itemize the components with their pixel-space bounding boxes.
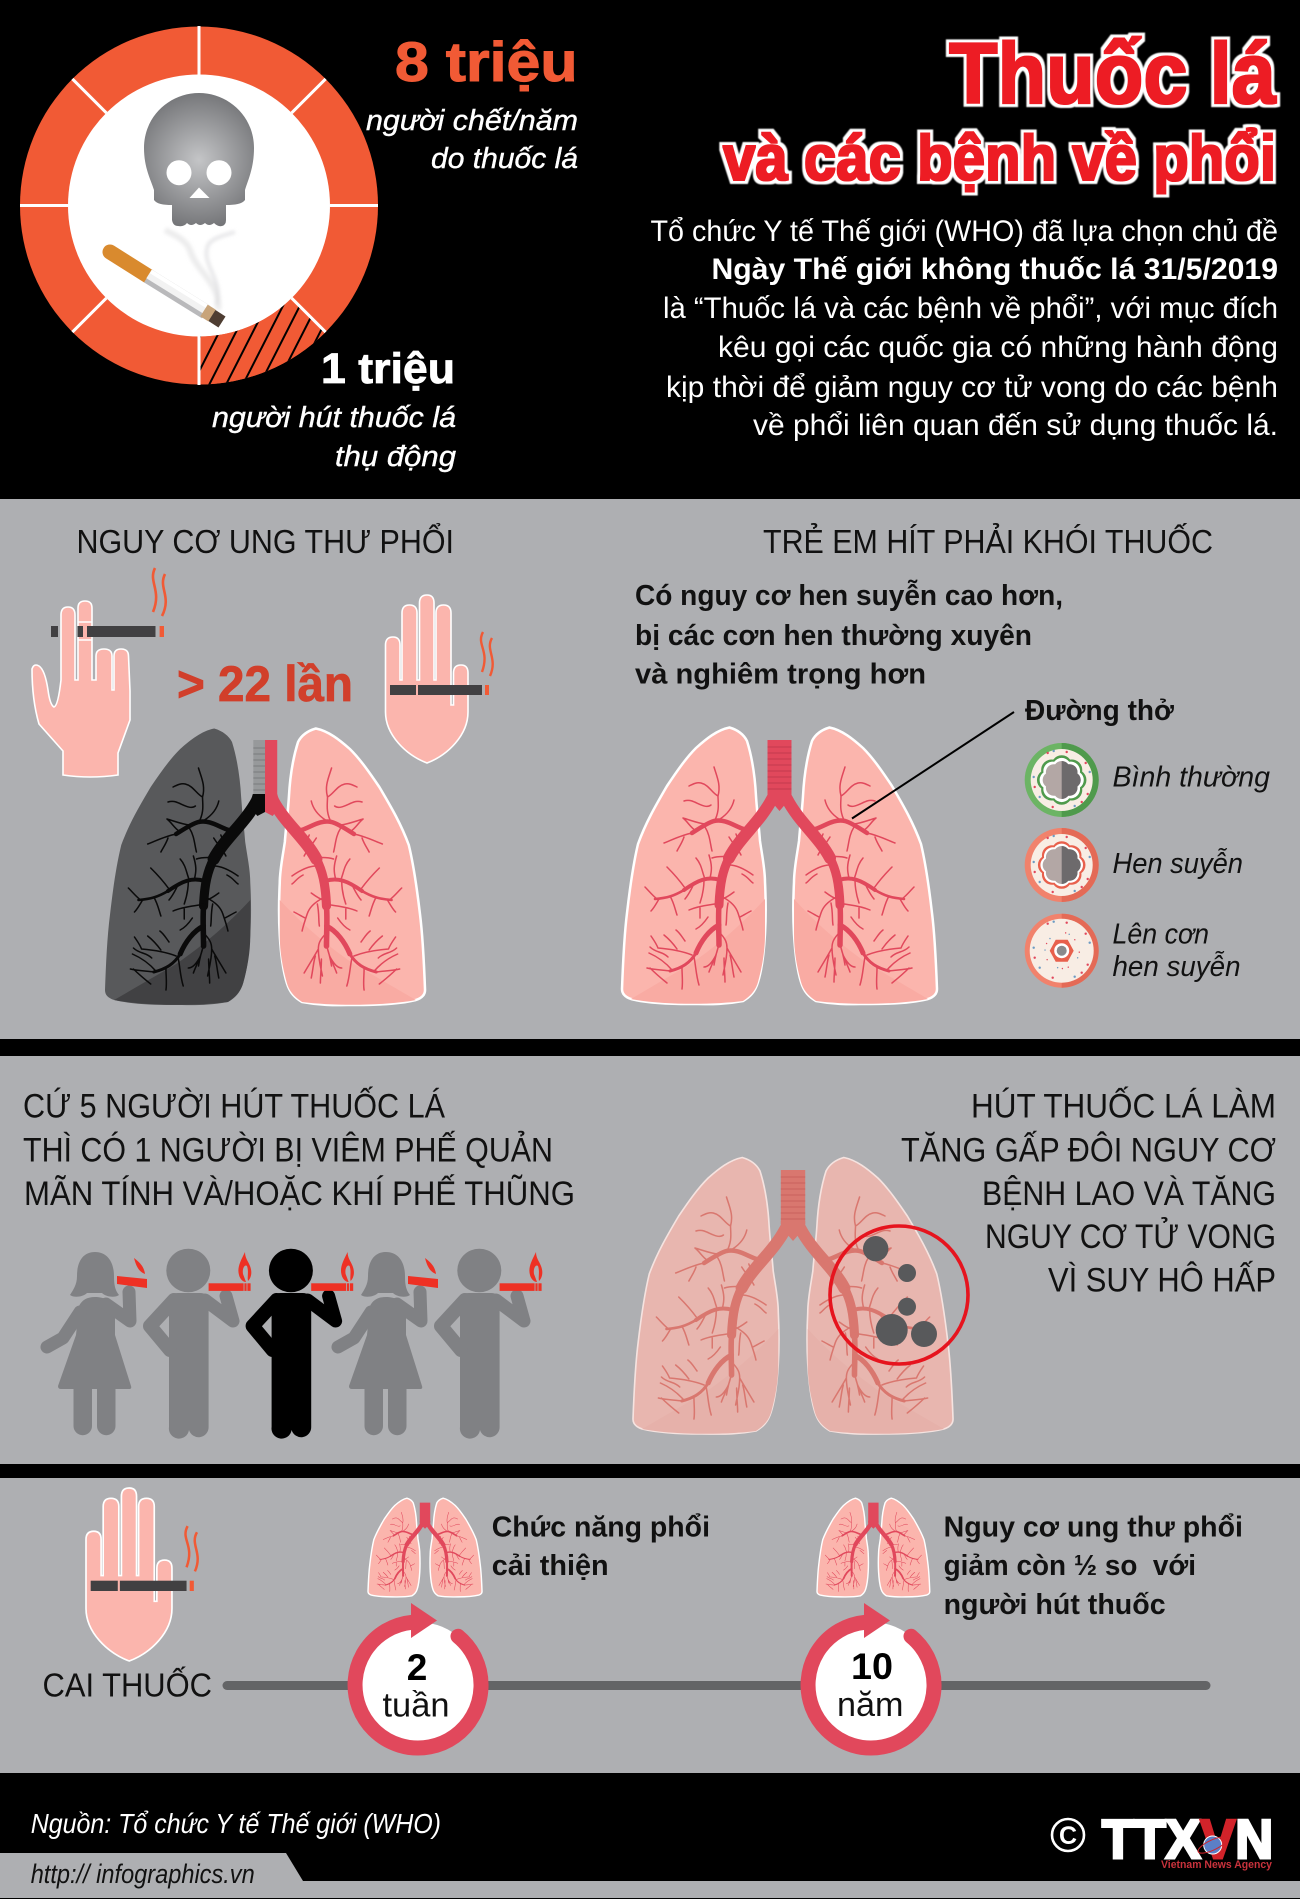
logo: TTXVN: TTXVN (1102, 1808, 1273, 1870)
label: asthma: Hen suyễn (1112, 847, 1243, 880)
panel: lung cancer risk and children (0, 499, 1300, 1039)
label: asthma attack (1112, 918, 1240, 983)
text block: asthma risk (635, 578, 1063, 690)
statistic: 1 million passive smokers: người hút thuốc lá (212, 402, 456, 434)
icon: normal airway (1025, 743, 1099, 817)
icon: cigarette (110, 252, 222, 322)
ribbon with website (0, 1853, 1300, 1898)
icon: skull (144, 93, 254, 226)
text block: tuberculosis risk (901, 1086, 1276, 1300)
milestone: two weeks: 2 (407, 1647, 427, 1688)
statistic: 1 million passive smokers (212, 345, 456, 473)
lungs: tuberculosis lesions (633, 1158, 968, 1434)
black smoker lung (105, 728, 265, 1005)
woman smoker 1 (47, 1252, 147, 1435)
text block: tuberculosis risk: VÌ SUY HÔ HẤP (1048, 1262, 1276, 1300)
text: cancer risk halves: giảm còn ½ so với (944, 1550, 1196, 1582)
heading: lung cancer risk: NGUY CƠ UNG THƯ PHỔI (76, 523, 454, 560)
woman smoker 4 (338, 1252, 438, 1435)
icon: hand holding cigarette between fingers (32, 568, 166, 777)
mini lungs: two weeks (368, 1498, 482, 1597)
label: airway: Đường thở (1025, 695, 1174, 727)
highlight circle (830, 1226, 968, 1364)
text: cancer risk halves (944, 1512, 1243, 1621)
title: Thuốc lá (949, 26, 1277, 122)
icon: hand with cigarette, quitting (86, 1488, 198, 1661)
lungs: smoker black lung versus healthy lung (105, 728, 425, 1005)
text block: tuberculosis risk: HÚT THUỐC LÁ LÀM (971, 1086, 1276, 1126)
label: quit smoking: CAI THUỐC (42, 1666, 212, 1704)
intro text block: kịp thời để giảm nguy cơ tử vong do các bệnh (666, 371, 1278, 404)
title (723, 26, 1277, 194)
label: normal: Bình thường (1112, 762, 1270, 794)
text: cancer risk halves: người hút thuốc (944, 1589, 1166, 1621)
lungs: healthy pair (622, 728, 937, 1004)
text: lung function improves (492, 1512, 710, 1582)
icon: asthma airway (1025, 828, 1099, 902)
intro text block: Tổ chức Y tế Thế giới (WHO) đã lựa chọn chủ đề (650, 215, 1278, 248)
man smoker 2 (150, 1249, 251, 1439)
text block: one in five smokers: MÃN TÍNH VÀ/HOẶC KHÍ PHẾ THŨNG (24, 1175, 575, 1213)
logo: TTXVN: Vietnam News Agency (1161, 1859, 1273, 1871)
text block: asthma risk: và nghiêm trọng hơn (635, 658, 926, 690)
intro text block: Ngày Thế giới không thuốc lá 31/5/2019 (712, 253, 1278, 286)
intro text block (650, 215, 1278, 442)
milestone: ten years: năm (837, 1686, 904, 1724)
text block: asthma risk: bị các cơn hen thường xuyên (635, 620, 1032, 652)
text block: one in five smokers (23, 1086, 575, 1213)
panel: footer (0, 1773, 1300, 1899)
man smoker 5 (441, 1249, 542, 1439)
statistic: more than 22 times: > 22 lần (177, 656, 353, 712)
mini lungs: ten years (817, 1498, 930, 1597)
leader line: airway (852, 712, 1014, 818)
lesions (863, 1236, 937, 1347)
milestone: ten years: 10 (851, 1646, 893, 1687)
icon: open hand with cigarette (386, 595, 493, 763)
text: cancer risk halves: Nguy cơ ung thư phổi (944, 1512, 1243, 1544)
statistic: 1 million passive smokers: 1 triệu (321, 345, 455, 393)
man smoker 3 highlighted black (253, 1249, 354, 1439)
panel: black header (0, 0, 1300, 499)
intro text block: là “Thuốc lá và các bệnh về phổi”, với mục đích (663, 292, 1278, 325)
ribbon with website: http:// infographics.vn (31, 1859, 255, 1889)
milestone: two weeks: tuần (382, 1687, 450, 1725)
healthy pink lung (265, 728, 425, 1005)
text block: asthma risk: Có nguy cơ hen suyễn cao hơn, (635, 578, 1063, 612)
copyright icon: C (1059, 1822, 1077, 1850)
intro text block: kêu gọi các quốc gia có những hành động (718, 331, 1278, 364)
heading: children inhaling smoke: TRẺ EM HÍT PHẢI KHÓI THUỐC (763, 522, 1213, 560)
milestone: two weeks (355, 1603, 481, 1748)
panel: quitting timeline (0, 1464, 1300, 1773)
hatched segment: one million passive smokers (199, 298, 326, 385)
text: lung function improves: Chức năng phổi (492, 1512, 710, 1544)
statistic: 8 million deaths (366, 30, 578, 175)
timeline bar (227, 1681, 1206, 1690)
statistic: 8 million deaths: người chết/năm (366, 105, 578, 137)
statistic: 1 million passive smokers: thụ động (335, 441, 456, 473)
statistic: 8 million deaths: do thuốc lá (431, 143, 578, 175)
label: asthma attack: hen suyễn (1112, 950, 1240, 983)
panel: bronchitis and tuberculosis (0, 1039, 1300, 1464)
milestone: ten years (808, 1603, 934, 1748)
statistic: 8 million deaths: 8 triệu (395, 30, 578, 93)
intro text block: về phổi liên quan đến sử dụng thuốc lá. (753, 409, 1278, 442)
text: lung function improves: cải thiện (492, 1550, 609, 1582)
donut chart: 8 segments with skull and cigarette (20, 26, 378, 385)
text block: one in five smokers: THÌ CÓ 1 NGƯỜI BỊ VIÊM PHẾ QUẢN (23, 1132, 553, 1170)
text block: one in five smokers: CỨ 5 NGƯỜI HÚT THUỐC LÁ (23, 1086, 445, 1126)
pictogram: five smokers, one black (47, 1249, 542, 1439)
label: asthma attack: Lên cơn (1112, 918, 1209, 950)
source text: Nguồn: Tổ chức Y tế Thế giới (WHO) (31, 1808, 441, 1839)
icon: smoke (165, 230, 235, 310)
icon: asthma attack airway (1025, 914, 1099, 988)
copyright icon (1052, 1819, 1084, 1851)
